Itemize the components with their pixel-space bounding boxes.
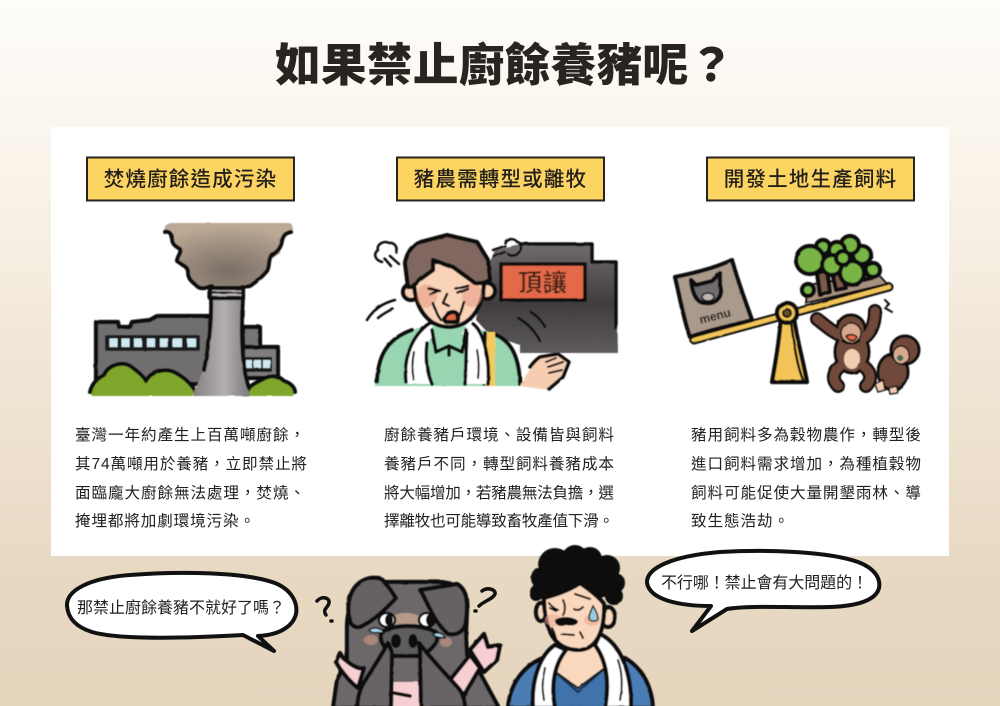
text: incineration: 掩埋都將加劇環境污染。	[75, 511, 255, 530]
text: farmers: 將大幅增加，若豬農無法負擔，選	[384, 484, 614, 502]
forest	[806, 274, 887, 303]
panel: land development for feed	[675, 158, 921, 530]
main building	[96, 316, 210, 384]
panel: incineration pollution	[75, 158, 307, 530]
fulcrum	[772, 318, 807, 382]
illustration: feed versus rainforest scale	[675, 236, 919, 394]
hand	[520, 354, 569, 390]
ears	[536, 603, 546, 621]
large ape	[817, 311, 875, 386]
chimney	[193, 298, 250, 396]
ears	[403, 284, 419, 300]
text: land: 致生態浩劫。	[691, 512, 789, 530]
tears	[369, 628, 445, 638]
pig arms	[357, 643, 392, 706]
speech bubble: left: 那禁止廚餘養豬不就好了嗎？	[77, 598, 285, 617]
character: crying pig	[333, 578, 500, 706]
shop building	[476, 244, 618, 353]
heading: land	[707, 158, 914, 200]
speech bubble: left	[67, 573, 296, 651]
facial features	[428, 286, 468, 320]
title: 如果禁止廚餘養豬呢？	[275, 40, 734, 91]
heading: farmers	[397, 158, 604, 200]
towel	[405, 322, 434, 384]
heading: land: 開發土地生產飼料	[724, 168, 897, 191]
sweat drop	[589, 606, 598, 621]
text: land: 豬用飼料多為穀物農作，轉型後	[691, 426, 921, 444]
motion lines	[367, 300, 545, 341]
bushes	[90, 364, 196, 396]
illustration: angry farmer and shop for transfer	[367, 235, 618, 390]
face	[544, 583, 604, 650]
text: incineration: 其74萬噸用於養豬，立即禁止將	[75, 455, 307, 473]
rear building	[243, 327, 260, 347]
text: farmers: 擇離牧也可能導致畜牧產值下滑。	[384, 512, 614, 530]
text: incineration	[75, 425, 307, 530]
strap	[486, 332, 495, 386]
illustration: smoking factory	[90, 223, 295, 396]
small ape	[875, 336, 919, 394]
heading: incineration	[87, 158, 294, 200]
white content panel	[51, 127, 949, 556]
pig belly	[393, 682, 420, 706]
text: incineration: 臺灣一年約產生上百萬噸廚餘，	[75, 425, 305, 444]
collar	[432, 330, 466, 355]
speech bubble: right: 不行哪！禁止會有大問題的！	[661, 574, 868, 592]
text: farmers: 養豬戶不同，轉型飼料養豬成本	[384, 455, 614, 473]
shirt	[508, 657, 653, 706]
beam	[694, 287, 889, 340]
transfer sign: 頂讓	[518, 270, 568, 297]
smoke	[164, 223, 293, 288]
hair	[530, 545, 625, 605]
text: land	[691, 426, 921, 530]
panel: farmers transition or quit	[367, 158, 618, 530]
face	[414, 262, 484, 327]
hair	[405, 235, 490, 287]
text: farmers: 廚餘養豬戶環境、設備皆與飼料	[384, 425, 614, 444]
pig tail wing	[470, 634, 500, 672]
facial features	[549, 594, 590, 638]
speech bubble: right	[647, 551, 879, 631]
pig body and head	[333, 582, 499, 706]
towel	[533, 645, 566, 706]
heading: farmers: 豬農需轉型或離牧	[414, 168, 587, 191]
pig ears	[348, 578, 396, 627]
pig icon on bag	[691, 273, 721, 303]
text: incineration: 面臨龐大廚餘無法處理，焚燒、	[75, 483, 305, 502]
text: farmers	[384, 425, 614, 530]
pig eyes	[379, 613, 395, 627]
pig snout	[381, 626, 437, 656]
character: worried farmer	[508, 545, 653, 706]
pig sleeves	[336, 653, 364, 688]
heading: incineration: 焚燒廚餘造成污染	[104, 167, 277, 191]
neck	[553, 642, 606, 688]
transfer sign	[501, 264, 585, 300]
text: land: 進口飼料需求增加，為種植穀物	[691, 455, 921, 473]
question mark left	[317, 598, 332, 621]
bag label: menu	[698, 305, 732, 327]
question mark right	[475, 589, 495, 611]
anger puffs	[375, 242, 399, 266]
feed bag	[675, 260, 752, 337]
text: land: 飼料可能促使大量開墾雨林、導	[691, 484, 921, 502]
body	[375, 326, 520, 386]
